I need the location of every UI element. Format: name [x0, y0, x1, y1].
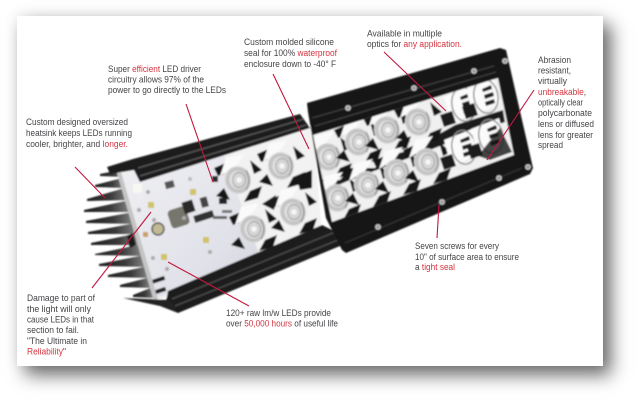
text: damage: the light will only — [27, 304, 91, 315]
text: lens — [538, 55, 594, 151]
text: driver circuitry — [108, 64, 226, 96]
text: screws: a tight seal — [415, 262, 455, 273]
red callout lines — [75, 52, 534, 306]
text: heatsink — [26, 117, 132, 150]
text: lens: lens for greater — [538, 130, 594, 141]
text: driver circuitry: Super efficient LED driver — [108, 64, 202, 75]
circuit board — [118, 150, 262, 298]
text: lens: Abrasion — [538, 55, 571, 66]
text: silicone seal: enclosure down to -40° F — [244, 59, 336, 70]
product photo: LED light bar — [84, 48, 533, 313]
text: raw LEDs: 120+ raw lm/w LEDs provide — [226, 308, 331, 319]
rear lenses — [213, 142, 318, 252]
text: damage: Damage to part of — [27, 293, 95, 304]
text: optics: optics for any application. — [367, 39, 462, 50]
text: optics — [367, 28, 462, 50]
text: lens: optically clear — [538, 98, 584, 108]
text: screws — [415, 241, 519, 273]
text: lens: virtually — [538, 76, 567, 87]
text: driver circuitry: circuitry allows 97% of the — [108, 74, 204, 86]
text: damage: "The Ultimate in — [27, 336, 87, 347]
text: lens: resistant, — [538, 66, 571, 76]
rear bottom rail — [166, 225, 340, 313]
housing screws — [345, 58, 531, 230]
arrow: heatsink — [75, 167, 105, 198]
arrow: damage section — [92, 212, 151, 288]
text: driver circuitry: power to go directly to the LEDs — [108, 85, 226, 96]
circuit board components — [133, 176, 232, 295]
text: screws: Seven screws for every — [415, 241, 499, 252]
text: damage: Reliability" — [27, 346, 66, 358]
text: raw LEDs — [226, 308, 338, 330]
arrow: optics — [384, 52, 446, 111]
rear top rail — [107, 114, 310, 182]
text: screws: 10" of surface area to ensure — [415, 252, 519, 263]
text: heatsink: cooler, brighter, and longer. — [26, 139, 128, 150]
arrow: polycarbonate lens — [487, 90, 534, 160]
text: lens: spread — [538, 140, 563, 151]
text: lens: polycarbonate — [538, 108, 592, 119]
heatsink fins — [84, 169, 155, 298]
infographic artwork — [26, 30, 594, 356]
text: damage — [27, 293, 95, 358]
arrow: silicone seal — [273, 74, 309, 149]
front housing — [307, 48, 533, 253]
text: damage: section to fail. — [27, 325, 79, 336]
text: silicone seal: seal for 100% waterproof — [244, 48, 337, 59]
arrow: screws — [437, 205, 439, 238]
rear left edge — [117, 172, 158, 302]
text: heatsink: Custom designed oversized — [26, 117, 128, 128]
arrow: driver circuitry — [186, 104, 213, 182]
panel: paper sheet with drop shadow — [17, 16, 603, 366]
front lens window — [313, 78, 514, 222]
text: optics: Available in multiple — [367, 28, 442, 40]
text: raw LEDs: over 50,000 hours of useful life — [226, 318, 338, 330]
text: silicone seal: Custom molded silicone — [244, 37, 334, 48]
text: damage: cause LEDs in that — [27, 314, 94, 326]
text: heatsink: heatsink keeps LEDs running — [26, 128, 132, 139]
text: silicone seal — [244, 37, 337, 70]
rear housing interior — [117, 125, 322, 302]
text: lens: unbreakable, — [538, 87, 586, 98]
text: lens: lens or diffused — [538, 119, 594, 130]
arrow: raw LEDs — [168, 262, 249, 306]
